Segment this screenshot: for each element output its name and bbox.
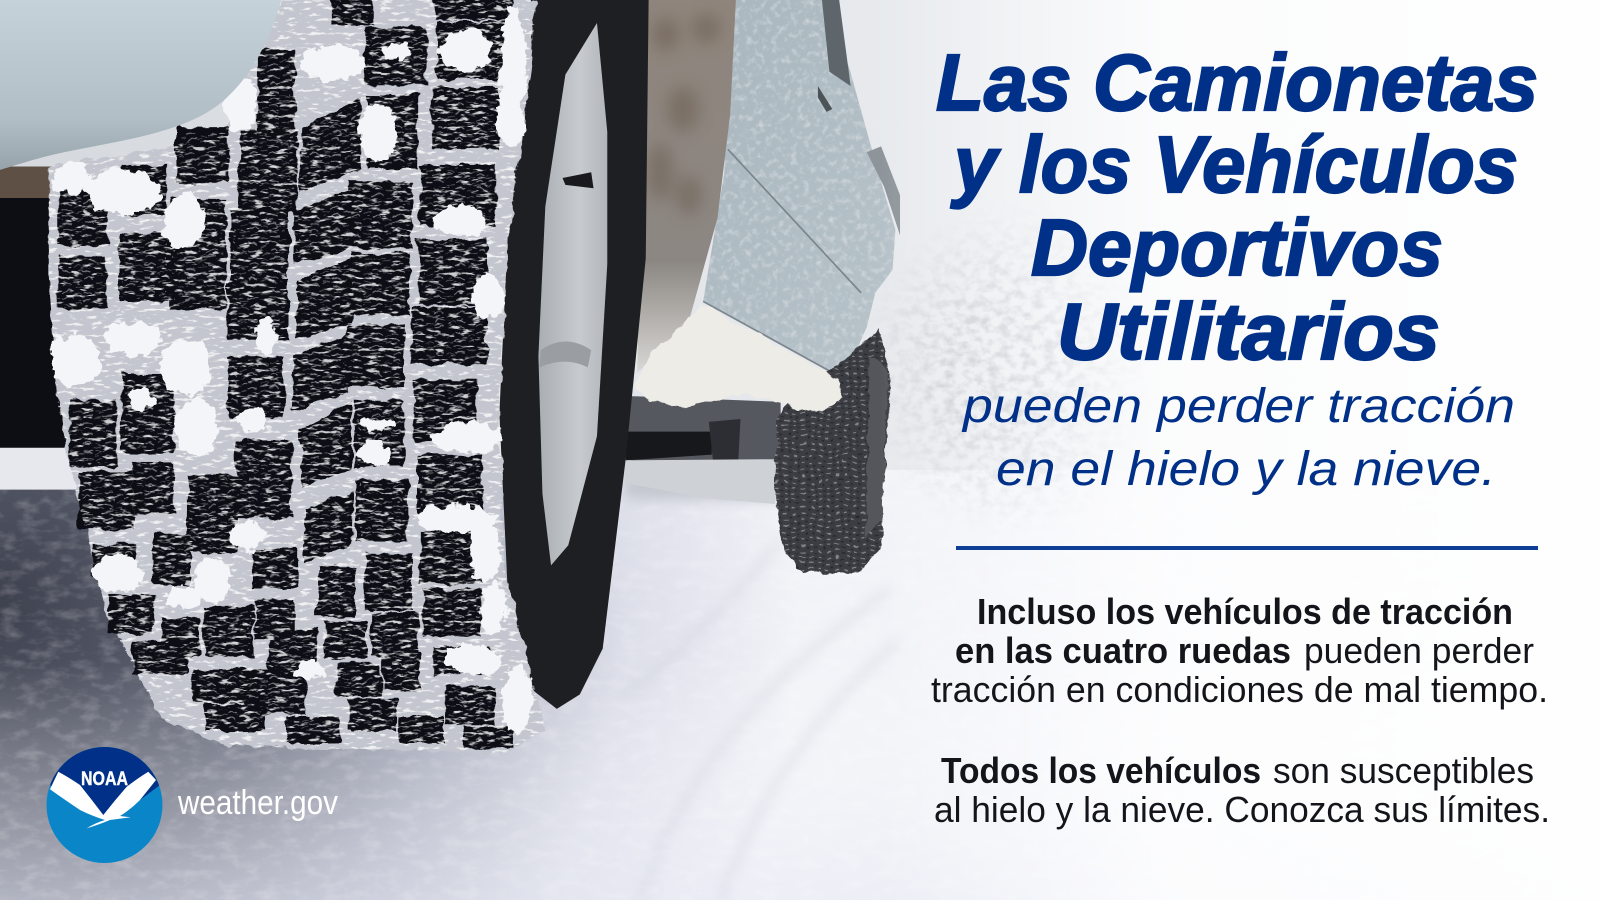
alloy wheel rim <box>538 23 607 565</box>
body text: all vehicles: son susceptibles <box>1273 750 1534 791</box>
white snow flecks over tread <box>34 0 551 763</box>
front fender of truck <box>0 0 281 170</box>
front tire sidewall <box>499 0 649 709</box>
truck parts in zoomed photo coordinates <box>0 0 907 763</box>
rear tire <box>775 327 890 573</box>
distant frosted bushes <box>626 459 775 504</box>
title: y los Vehículos <box>950 120 1518 209</box>
snowy road ground <box>0 470 1088 900</box>
sky and misty background <box>0 0 1600 560</box>
NOAA logo <box>46 746 164 864</box>
snow crust on rocker panel <box>634 304 844 413</box>
body text: four wheel drive <box>931 591 1548 710</box>
door and body panel <box>702 0 900 371</box>
divider line <box>956 546 1538 550</box>
body text: four wheel drive: pueden perder <box>1304 630 1534 671</box>
subtitle: en el hielo y la nieve. <box>996 443 1496 496</box>
title: Deportivos <box>1031 203 1443 292</box>
body text: four wheel drive: en las cuatro ruedas <box>955 630 1291 671</box>
white bird swoosh <box>50 772 156 828</box>
title: Las Camionetas <box>936 38 1538 127</box>
frosted trees behind truck <box>625 200 1160 540</box>
wheel arch with road grime <box>637 0 736 373</box>
logo disc <box>46 746 164 864</box>
photo: truck tire in snow <box>0 0 1136 900</box>
white haze behind text panel <box>880 0 1600 900</box>
tread blocks <box>60 0 511 746</box>
dark underside of truck <box>0 166 75 448</box>
chassis underneath <box>626 396 781 476</box>
weather.gov url: weather.gov <box>177 784 338 822</box>
subtitle <box>961 380 1515 496</box>
tread base packed with snow <box>49 0 545 753</box>
NOAA wordmark: NOAA <box>81 769 128 790</box>
subtitle: pueden perder tracción <box>961 380 1515 433</box>
title: Utilitarios <box>1057 287 1440 376</box>
body text: four wheel drive: Incluso los vehículos de tracción <box>977 591 1513 632</box>
snow clumps on tread <box>49 6 532 735</box>
body text: all vehicles: Todos los vehículos <box>941 750 1261 791</box>
body text: all vehicles <box>934 750 1550 830</box>
body text: all vehicles: al hielo y la nieve. Conozca sus límites. <box>934 789 1550 830</box>
body text: four wheel drive: tracción en condiciones de mal tiempo. <box>931 669 1548 710</box>
title <box>936 38 1538 376</box>
snow strip behind tire <box>0 445 86 490</box>
